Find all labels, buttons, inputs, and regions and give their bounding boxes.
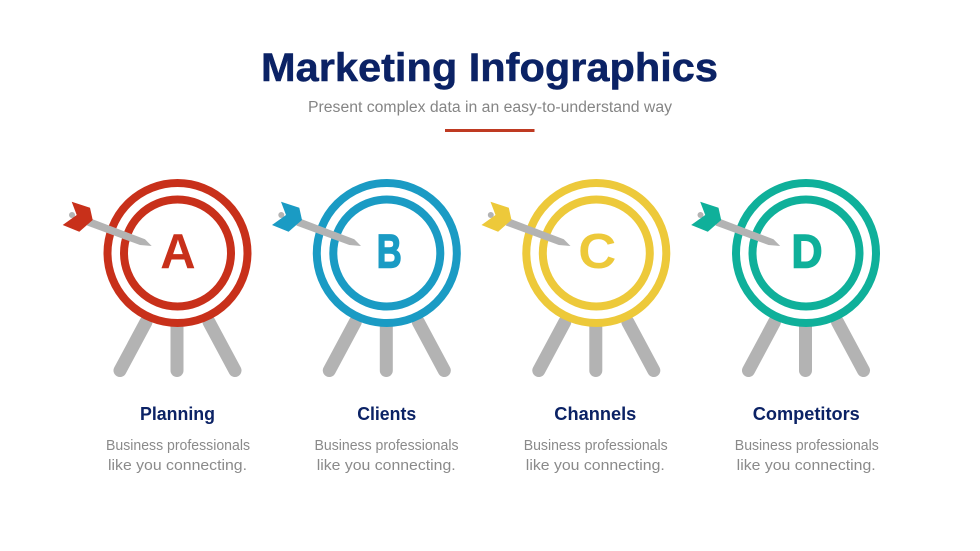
subtitle: Present complex data in an easy-to-understand way [308, 99, 672, 116]
panel: D Competitors [691, 183, 879, 474]
description [735, 438, 879, 474]
description: like you connecting. [317, 458, 456, 474]
target rings [736, 183, 876, 323]
description [106, 438, 250, 474]
description: Business professionals [735, 438, 879, 454]
description: Business professionals [524, 438, 668, 454]
dart [272, 202, 361, 246]
panel: B Clients [272, 183, 458, 474]
description: like you connecting. [526, 458, 665, 474]
target stand legs [329, 322, 444, 370]
heading: Planning [140, 404, 215, 424]
dart [691, 202, 780, 246]
target rings [526, 183, 666, 323]
letter D: D [792, 226, 822, 278]
description [524, 438, 668, 474]
heading: Competitors [753, 404, 860, 424]
target stand legs [120, 322, 235, 370]
target stand legs [539, 322, 654, 370]
title: Marketing Infographics [261, 46, 718, 90]
description: like you connecting. [737, 458, 876, 474]
letter B: B [377, 226, 402, 278]
heading: Channels [554, 404, 636, 424]
letter A: A [160, 225, 196, 279]
dart [63, 202, 152, 246]
panel: C Channels [482, 183, 668, 474]
title underline [445, 129, 534, 132]
description: Business professionals [106, 438, 250, 454]
panel: A Planning [63, 183, 250, 474]
description [314, 438, 458, 474]
target stand legs [748, 322, 864, 370]
target rings [108, 183, 248, 323]
heading: Clients [357, 404, 416, 424]
target rings [317, 183, 457, 323]
letter C: C [578, 225, 616, 279]
description: Business professionals [314, 438, 458, 454]
dart [482, 202, 570, 246]
header [261, 46, 718, 132]
description: like you connecting. [108, 458, 247, 474]
